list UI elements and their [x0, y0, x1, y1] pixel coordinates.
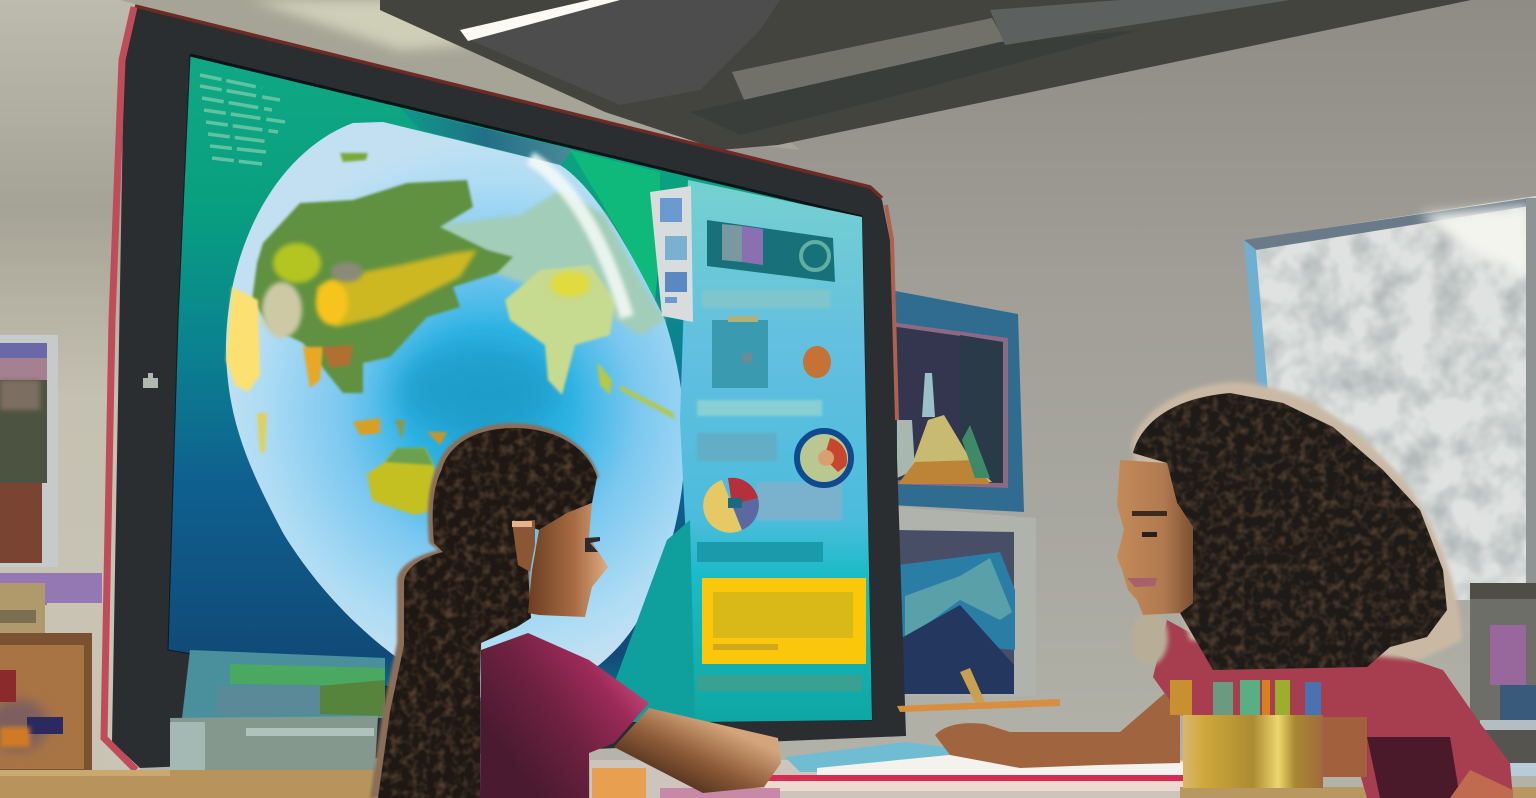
continent: East Asia	[505, 265, 615, 395]
pale tuft	[1132, 611, 1168, 665]
continent: Eurasia	[252, 180, 513, 393]
arm and hand	[935, 693, 1180, 768]
ponytail and hair	[378, 428, 597, 798]
orange icon	[803, 346, 831, 378]
shirt	[1153, 620, 1513, 798]
hair rim	[370, 423, 599, 798]
face	[528, 503, 608, 617]
upper picture	[890, 290, 1024, 512]
eye	[585, 537, 600, 552]
right wall	[700, 0, 1536, 798]
left wall	[0, 0, 140, 798]
picture behind right girl	[1470, 583, 1536, 776]
globe highlight arc	[530, 158, 627, 317]
dark square icon	[712, 320, 768, 388]
shelf with purple strip and picture frame	[0, 573, 103, 771]
pencil	[897, 699, 1060, 712]
dark media tile	[707, 220, 835, 282]
ceiling light	[460, 0, 620, 41]
continent: left edge yellow	[226, 287, 260, 392]
ring chart	[797, 431, 851, 485]
pencil cup	[1170, 680, 1323, 788]
hair halo	[1132, 382, 1462, 660]
face	[1117, 460, 1193, 615]
yellow callout	[702, 578, 866, 664]
wall poster far left	[0, 335, 58, 567]
globe	[226, 122, 685, 700]
ceiling	[120, 0, 1471, 150]
girl right	[897, 382, 1513, 798]
pie chart	[703, 478, 759, 533]
info panel	[600, 180, 872, 722]
window with mountains	[1244, 196, 1536, 600]
tablet camera	[143, 373, 158, 388]
vertical label	[650, 186, 693, 322]
stack of books	[170, 650, 385, 786]
cloud-veiled northern land	[440, 190, 665, 335]
maroon shirt	[480, 633, 649, 798]
continent: islands	[257, 153, 676, 453]
arm	[614, 708, 781, 793]
desk	[0, 742, 1536, 798]
continent: Australia	[367, 448, 435, 515]
tablet body	[104, 6, 906, 770]
screen text lines, top left	[200, 75, 285, 164]
girl left	[370, 423, 781, 798]
lower picture	[890, 506, 1036, 696]
right wall framed pictures	[890, 290, 1036, 696]
text lines	[697, 290, 842, 520]
curly hair	[1133, 393, 1447, 670]
tablet screen	[168, 55, 872, 722]
ear	[512, 520, 535, 572]
